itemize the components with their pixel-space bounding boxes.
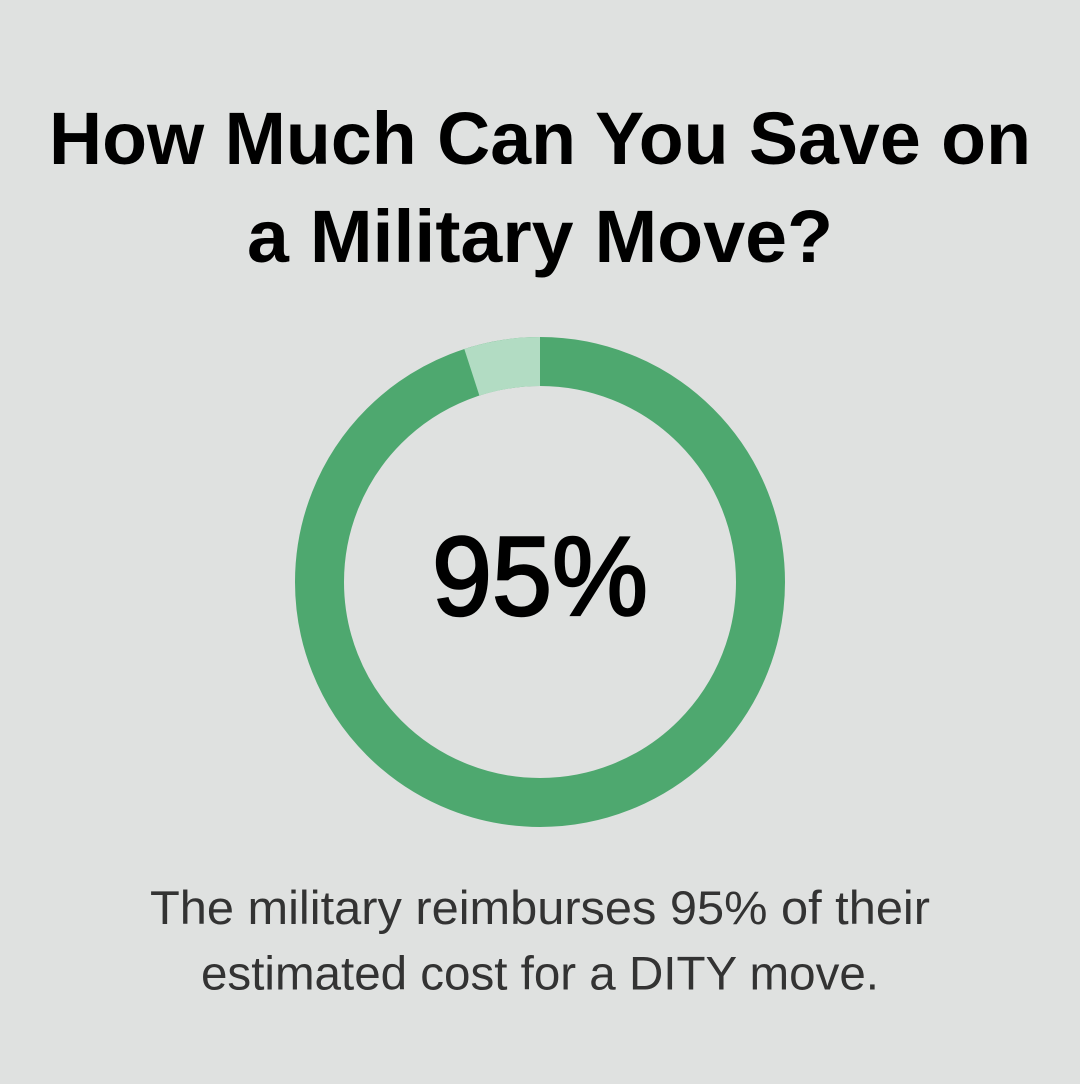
title: a Military Move?: [247, 195, 833, 278]
donut chart: 95%: [320, 337, 760, 802]
caption: The military reimburses 95% of their: [150, 881, 930, 934]
caption: estimated cost for a DITY move.: [201, 946, 879, 1000]
title: [49, 97, 1031, 278]
caption: [150, 881, 930, 1000]
title: How Much Can You Save on: [49, 97, 1031, 180]
center value: 95%: [432, 514, 648, 639]
